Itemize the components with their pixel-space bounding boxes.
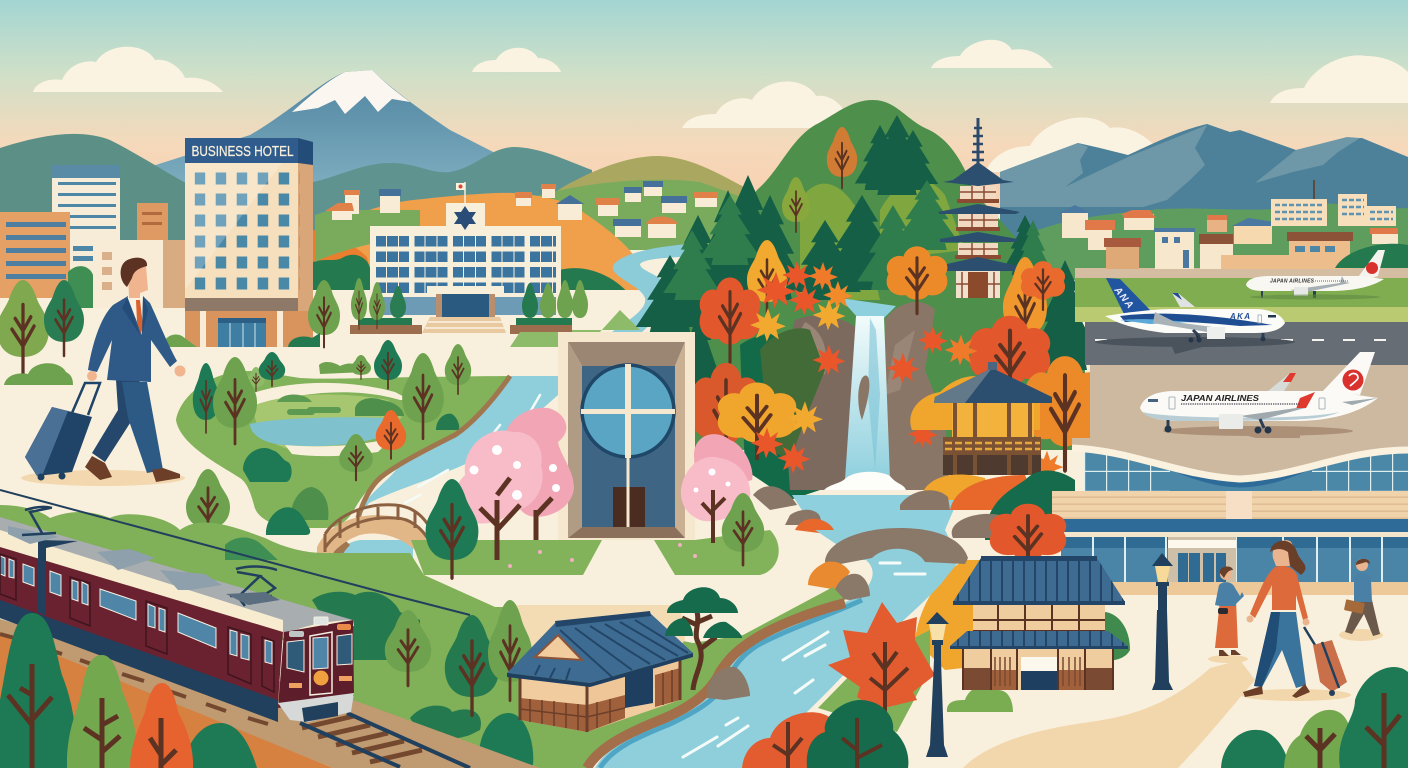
village on the left hillside <box>315 181 718 262</box>
mixed bushes beside pool <box>753 471 1075 540</box>
mountains: right range <box>1000 124 1408 280</box>
railway track <box>0 610 540 768</box>
airfield <box>1075 268 1408 455</box>
clouds <box>33 40 1408 172</box>
plane: Japan Airlines <box>1140 352 1378 449</box>
autumn trees on the hill <box>692 127 1105 470</box>
person: man with briefcase <box>1339 559 1383 641</box>
train <box>0 507 354 722</box>
plane: Japan Airlines: JAPAN AIRLINES <box>1181 393 1259 403</box>
street lamp left <box>926 612 949 757</box>
plane: ANA on runway: ANA <box>1111 284 1135 311</box>
sky background <box>0 0 1408 210</box>
green lawns near church <box>411 530 779 575</box>
rocks beside waterfall <box>760 302 950 490</box>
forested hill background <box>660 100 1085 450</box>
conifers: lighter <box>663 180 1051 300</box>
person: woman with suitcase <box>1241 540 1351 701</box>
traditional inn <box>950 556 1128 690</box>
dark green tree by the bridge <box>426 479 478 578</box>
upper river <box>612 244 692 334</box>
doors <box>0 554 274 692</box>
pagoda <box>938 118 1020 298</box>
autumn foreground trees centre <box>742 700 908 768</box>
school building <box>350 182 572 334</box>
front face <box>278 620 354 708</box>
right river bank green <box>818 630 930 732</box>
bonsai pine <box>665 587 742 690</box>
traditional house <box>507 611 693 732</box>
small green tree by church <box>722 493 764 565</box>
green bush by inn <box>947 685 1013 712</box>
tall building <box>52 165 120 277</box>
orange bush and rock by the bank <box>808 562 870 600</box>
windows <box>0 556 272 664</box>
stone bridge <box>825 528 968 566</box>
trees on slope <box>385 600 532 715</box>
scattered petals <box>508 543 697 568</box>
autumn tree behind the inn <box>990 504 1066 574</box>
orange soil embankment <box>0 630 333 768</box>
wooden arched bridge <box>317 505 435 556</box>
pool below the fall <box>792 495 960 530</box>
overhead wire <box>0 490 470 615</box>
roof <box>0 517 353 636</box>
foreground trees bottom left <box>0 613 257 768</box>
pavilion <box>910 362 1052 475</box>
conifers <box>636 115 1101 500</box>
back shoe <box>85 456 112 480</box>
school garden trees <box>163 278 640 347</box>
maple leaves <box>750 261 1064 481</box>
suitcase <box>1304 627 1347 696</box>
street lamp right <box>1152 553 1173 690</box>
front leg <box>122 382 163 473</box>
lower river and pond <box>328 376 558 615</box>
round window with cross <box>581 364 675 458</box>
plane: small JAL on far apron <box>1246 250 1385 300</box>
waterfall <box>824 298 906 490</box>
left city buildings <box>0 165 185 308</box>
green slope behind train <box>0 505 845 768</box>
plane: small JAL on far apron: JAPAN AIRLINES <box>1270 278 1315 284</box>
pantographs <box>230 566 277 606</box>
business hotel <box>185 138 313 347</box>
Mount Fuji <box>140 70 592 240</box>
foreground trees bottom right <box>1221 667 1408 768</box>
hills: olive and orange <box>313 156 750 325</box>
yellow bush beside inn <box>915 560 1000 670</box>
airport terminal <box>1052 438 1408 595</box>
river rock <box>707 667 750 700</box>
main river <box>595 530 960 768</box>
church <box>558 332 695 540</box>
cream block <box>93 240 185 308</box>
car bodies <box>0 547 283 702</box>
roof units <box>97 549 155 570</box>
big orange maple <box>828 602 935 713</box>
green bush behind inn <box>1100 612 1130 661</box>
torso <box>88 296 177 382</box>
sign text: BUSINESS HOTEL <box>192 144 294 160</box>
businessman with suitcase <box>21 258 186 486</box>
walkway <box>963 660 1255 768</box>
park green <box>176 362 510 535</box>
mountains: left hills <box>0 134 195 300</box>
plane: ANA on runway <box>1095 278 1295 354</box>
head <box>128 266 148 298</box>
cherry tree right <box>681 434 753 543</box>
front shoe <box>152 468 180 482</box>
park trees <box>0 280 471 541</box>
rolling suitcase <box>25 383 100 480</box>
person: woman in orange skirt <box>1208 566 1248 663</box>
ground <box>0 290 1408 768</box>
plane: ANA on runway: AKA <box>1229 312 1250 321</box>
cherry tree left <box>454 408 574 560</box>
small brick building <box>137 203 168 243</box>
orange building <box>0 212 70 298</box>
right village <box>1059 180 1408 269</box>
back leg <box>92 380 140 462</box>
